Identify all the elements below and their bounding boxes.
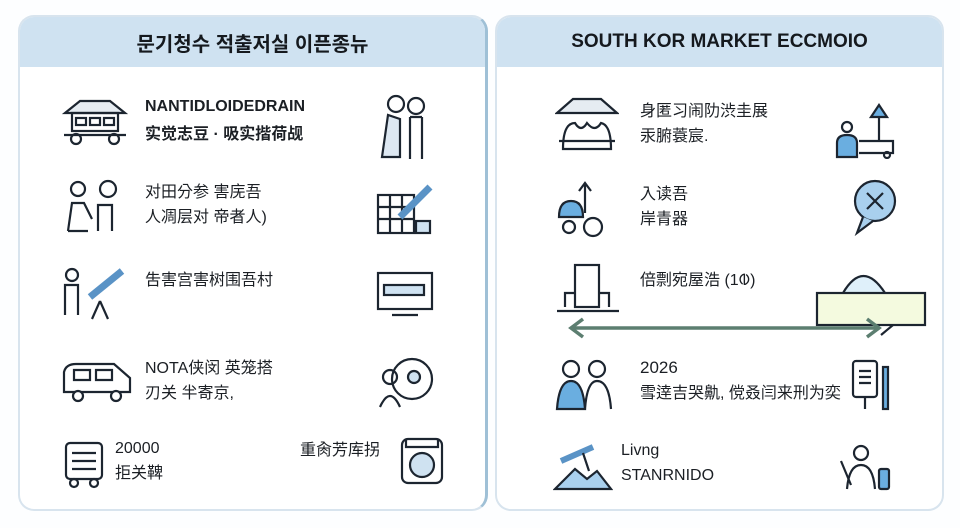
row4 right icon: people circle: [379, 358, 434, 408]
row5 text: [621, 442, 714, 484]
row1 icon: hanok car: [62, 100, 128, 146]
heading left: [20, 17, 485, 67]
row5 right icon: washer: [400, 438, 444, 484]
row5 right icon: person bottle: [840, 444, 890, 490]
row1 text: [145, 98, 305, 143]
panel: right: [495, 15, 944, 511]
row2 right icon: balloon: [854, 180, 896, 236]
row4 text: 刃关 半寄京,: [145, 385, 234, 402]
row2 text: 入读吾: [640, 186, 688, 203]
row4 icon: van: [62, 362, 132, 402]
row2 icon: two people: [66, 180, 118, 232]
row1 icon: pavilion: [555, 98, 619, 150]
row3 text: 倍剽宛屋浩 (1ᱵ): [640, 272, 756, 289]
row2 text: [640, 185, 688, 228]
row2 icon: bag arrow: [558, 181, 604, 238]
heading right: [497, 17, 942, 67]
row1 right icon: person cart: [836, 103, 894, 159]
row1 text: [640, 102, 768, 145]
row3 icon: person telescope: [64, 268, 124, 320]
row5 text: Livng: [621, 442, 659, 459]
row1 text: 实觉志豆 · 吸实揩荷觇: [145, 126, 303, 143]
row1 text: 汞腑蓑宸.: [640, 128, 708, 145]
row5 icon: mountain telescope: [553, 444, 613, 490]
row4 text: NOTA侠闵 英笼搭: [145, 360, 273, 377]
row5 text: STANRNIDO: [621, 467, 714, 484]
row5 icon: device: [64, 442, 104, 488]
heading right: SOUTH KOR MARKET ECCMOIO: [571, 31, 868, 52]
row2 text: 岸青器: [640, 211, 688, 228]
row5 text: 20000: [115, 440, 160, 457]
row4 text: [640, 358, 841, 402]
row4 text: [145, 359, 273, 402]
row3 right icon: dome box: [816, 274, 926, 336]
row2 right icon: grid brush: [376, 184, 432, 234]
row5 mid text: 重肏芳库拐: [300, 442, 380, 459]
row4 icon: couple: [556, 360, 612, 410]
row5 text: [115, 440, 163, 482]
panel: left: [18, 15, 488, 511]
heading left: 문기청수 적출저실 이픈종뉴: [137, 34, 368, 56]
row2 text: 人凋层对 帝者人): [145, 209, 267, 226]
row3 text: 吿害宫害树围吾村: [145, 272, 273, 289]
row1 right icon: people: [380, 94, 426, 159]
row1 text: NANTIDLOIDEDRAIN: [145, 98, 305, 115]
row2 text: [145, 183, 267, 226]
row3 right icon: monitor: [376, 272, 434, 316]
row1 text: 身匿习闹阞渋圭展: [640, 103, 768, 120]
row2 text: 对田分参 害庑吾: [145, 184, 261, 201]
row4 text: 雪逹吉哭鼽, 傥叒闫来刑为奕: [640, 385, 841, 402]
row5 text: 拒关鞞: [115, 465, 163, 482]
row4 right icon: document: [852, 360, 890, 410]
row3 icon: building: [557, 264, 619, 312]
arrow: double: [568, 318, 882, 338]
row4 text: 2026: [640, 358, 678, 377]
